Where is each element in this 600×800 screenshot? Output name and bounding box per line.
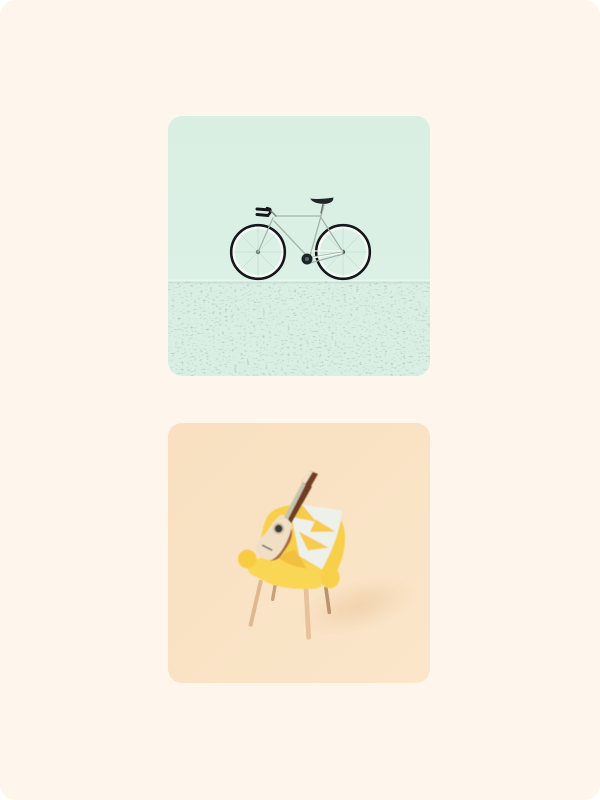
illustration: chair bbox=[238, 471, 345, 637]
chair back bbox=[260, 505, 345, 573]
bridge bbox=[263, 545, 272, 550]
chair shadow bbox=[318, 586, 398, 626]
handlebars bbox=[257, 209, 270, 216]
seat shading bbox=[279, 550, 306, 568]
left arm bbox=[238, 550, 257, 568]
sound hole bbox=[275, 525, 283, 533]
right arm bbox=[320, 570, 340, 589]
rear wheel bbox=[316, 225, 370, 279]
panel: chair and ukulele photo bbox=[168, 423, 430, 683]
headstock bbox=[301, 471, 318, 488]
cushion bbox=[292, 504, 342, 569]
chair legs bbox=[251, 582, 329, 637]
neck bbox=[284, 482, 306, 519]
icon: bicycle bbox=[231, 198, 370, 279]
chainring bbox=[302, 254, 312, 264]
front wheel bbox=[231, 225, 285, 279]
frame bbox=[258, 205, 343, 263]
saddle bbox=[311, 198, 333, 204]
ukulele bbox=[256, 471, 318, 561]
wall bbox=[168, 116, 430, 282]
panel: bicycle photo bbox=[168, 116, 430, 376]
backdrop bbox=[168, 423, 430, 683]
textured ledge bbox=[168, 280, 430, 376]
chair seat bbox=[248, 555, 324, 589]
ukulele body bbox=[256, 515, 292, 560]
